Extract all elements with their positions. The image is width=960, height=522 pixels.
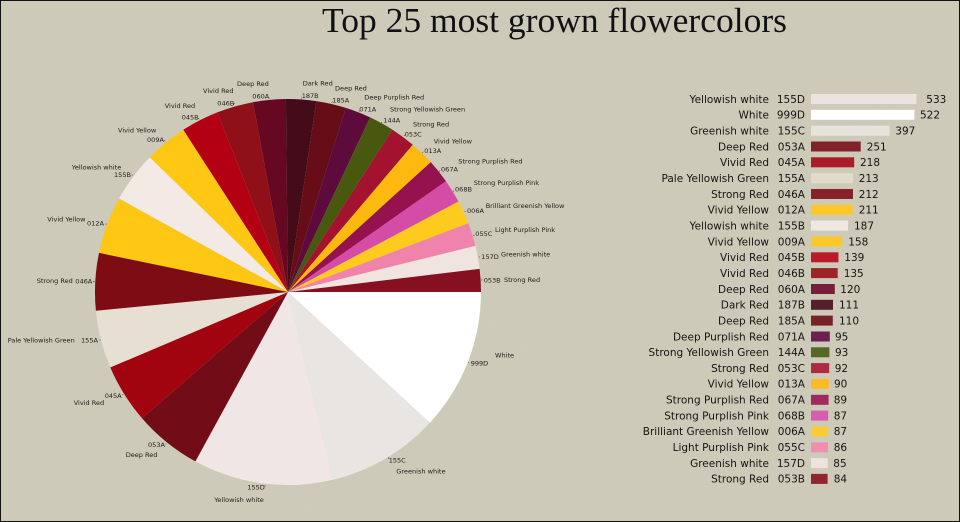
row: Vivid Yellow 009A: Vivid Yellow (708, 236, 769, 248)
row: Greenish white 157D: 157D (777, 458, 805, 470)
row: Strong Red 053C (711, 363, 848, 375)
label: 053C: 053C (405, 131, 422, 139)
wedge: Strong Red 046A (95, 253, 288, 311)
label: 045B (165, 102, 199, 122)
label: 053C: Strong Red (413, 120, 449, 128)
label: 155B (71, 163, 131, 179)
label: 185A (332, 84, 367, 105)
row: Vivid Yellow 013A: Vivid Yellow (708, 379, 769, 391)
label: 006A: Brilliant Greenish Yellow (486, 202, 565, 210)
wedge: Vivid Red 045B (183, 112, 288, 292)
label: 068B (455, 179, 539, 194)
label: 155C: 155C (389, 456, 406, 464)
title: Top 25 most grown flowercolors (322, 1, 787, 40)
row: Brilliant Greenish Yellow 006A: 87 (834, 426, 847, 438)
wedge: White 999D (288, 292, 481, 423)
row: Pale Yellowish Green 155A: 213 (859, 173, 879, 185)
pie labels (8, 79, 565, 504)
row: Greenish white 155C (690, 126, 915, 138)
row: Pale Yellowish Green 155A (661, 173, 879, 185)
row: Deep Red 053A: 251 (867, 141, 887, 153)
wedge: Strong Purplish Red 067A (288, 162, 446, 292)
row: Pale Yellowish Green 155A: 155A (778, 173, 806, 185)
wedge: Yellowish white 155B (119, 157, 288, 292)
row: White 999D: 999D (777, 110, 805, 122)
row: Yellowish white 155B (689, 220, 874, 232)
row: Deep Purplish Red 071A: 071A (778, 331, 806, 343)
row: White 999D: 522 (920, 110, 940, 122)
label: 006A (467, 202, 565, 215)
row: Vivid Red 046B (720, 268, 864, 280)
label: 071A: 071A (359, 105, 377, 113)
label: 053A (126, 441, 165, 459)
row: Greenish white 155C: Greenish white (690, 126, 769, 138)
row: Deep Red 185A: Deep Red (718, 315, 769, 327)
row: Pale Yellowish Green 155A: Pale Yellowish Green (661, 173, 769, 185)
row: Light Purplish Pink 055C: 055C (778, 442, 805, 454)
label: 046A (37, 277, 93, 285)
row: Deep Red 185A: 185A (778, 315, 806, 327)
row: Deep Red 060A (718, 284, 860, 296)
label: 067A (441, 157, 523, 173)
row: Strong Red 046A: 046A (778, 189, 806, 201)
wedge: Vivid Red 046B (217, 102, 288, 292)
label: 009A: 009A (147, 136, 164, 144)
row: Greenish white 155C: 397 (895, 126, 915, 138)
label: 009A: Vivid Yellow (118, 126, 157, 134)
label: 053B (484, 276, 540, 284)
row: Deep Red 185A: 110 (839, 315, 859, 327)
label: 060A: 060A (252, 93, 270, 101)
label: 155C: Greenish white (396, 467, 446, 475)
label: 009A (118, 126, 164, 144)
label: 155A: 155A (81, 336, 98, 344)
row: Deep Purplish Red 071A: Deep Purplish Red (673, 331, 769, 343)
wedge: Strong Red 053B (288, 269, 481, 292)
row: Vivid Red 046B: 046B (778, 268, 805, 280)
label: 068B: 068B (455, 186, 472, 194)
row: Deep Red 053A: Deep Red (718, 141, 769, 153)
label: 071A (359, 93, 424, 113)
row: Dark Red 187B: Dark Red (721, 300, 769, 312)
row: Greenish white 157D (690, 458, 847, 470)
pie chart (95, 99, 481, 485)
label: 045A (74, 392, 122, 407)
label: 046B (203, 87, 235, 107)
label: 053B: Strong Red (504, 276, 540, 284)
row: Vivid Red 045B: Vivid Red (720, 252, 769, 264)
label: 071A: Deep Purplish Red (364, 93, 424, 101)
label: 187B (302, 79, 333, 100)
row: Strong Purplish Pink 068B: Strong Purplish Pink (664, 410, 770, 422)
label: 144A: Strong Yellowish Green (390, 105, 465, 113)
row: Vivid Yellow 012A: 012A (778, 205, 806, 217)
row: Strong Red 053C: 053C (778, 363, 805, 375)
row: Strong Purplish Pink 068B (664, 410, 847, 422)
wedge: Strong Purplish Pink 068B (288, 181, 458, 292)
row: Strong Yellowish Green 144A: Strong Yellowish Green (649, 347, 769, 359)
row: Vivid Yellow 013A: 013A (778, 379, 806, 391)
wedge: Dark Red 187B (286, 99, 316, 292)
row: Vivid Yellow 012A: Vivid Yellow (708, 205, 769, 217)
label: 068B: Strong Purplish Pink (474, 179, 539, 187)
row: White 999D (738, 110, 940, 122)
row: Strong Red 046A: 212 (859, 189, 879, 201)
wedge: Strong Red 053C (288, 130, 413, 292)
row: Vivid Yellow 013A: 90 (834, 379, 847, 391)
row: Vivid Red 045A: 045A (778, 157, 806, 169)
row: Strong Yellowish Green 144A: 144A (778, 347, 806, 359)
row: Yellowish white 155B: Yellowish white (689, 220, 769, 232)
label: 055C: Light Purplish Pink (495, 226, 555, 234)
wedge: Yellowish white 155D (195, 292, 333, 485)
label: 155B: Yellowish white (71, 163, 121, 171)
row: Strong Red 053C: 92 (835, 363, 848, 375)
row: Vivid Red 045A: 218 (860, 157, 880, 169)
label: 155C (389, 456, 446, 475)
label: 155B: 155B (114, 171, 131, 179)
row: Light Purplish Pink 055C: 86 (834, 442, 847, 454)
row: Vivid Yellow 012A (708, 205, 879, 217)
row: Vivid Yellow 009A: 009A (778, 236, 806, 248)
row: White 999D: White (738, 110, 769, 122)
wedge: Deep Purplish Red 071A (288, 108, 370, 292)
wedge: Pale Yellowish Green 155A (96, 292, 288, 367)
row: Yellowish white 155D: Yellowish white (689, 94, 769, 106)
row: Vivid Yellow 012A: 211 (859, 205, 879, 217)
label: 055C: 055C (475, 230, 493, 238)
row: Vivid Red 045A (720, 157, 880, 169)
label: 053C (405, 120, 449, 139)
label: 046A: Strong Red (37, 277, 73, 285)
label: 067A: 067A (441, 165, 458, 173)
row: Vivid Red 046B: Vivid Red (720, 268, 769, 280)
row: Strong Purplish Pink 068B: 87 (834, 410, 847, 422)
row: Vivid Red 046B: 135 (844, 268, 864, 280)
row: Dark Red 187B: 187B (778, 300, 805, 312)
row: Yellowish white 155B: 155B (778, 220, 805, 232)
label: 053A: 053A (148, 441, 165, 449)
row: Yellowish white 155D (689, 94, 946, 106)
row: Greenish white 157D: 85 (833, 458, 847, 470)
label: 999D: 999D (471, 359, 488, 367)
wedge: Light Purplish Pink 055C (288, 223, 475, 292)
row: Yellowish white 155D: 533 (926, 94, 946, 106)
label: 060A (237, 80, 270, 101)
wedge: Deep Red 185A (288, 101, 346, 292)
row: Strong Yellowish Green 144A: 93 (835, 347, 848, 359)
label: 053A: Deep Red (126, 451, 157, 459)
label: 155A: Pale Yellowish Green (8, 336, 75, 344)
row: Strong Red 053B: 84 (834, 474, 847, 486)
label: 999D (471, 351, 514, 367)
label: 144A (383, 105, 465, 124)
row: Greenish white 155C: 155C (778, 126, 805, 138)
row: Greenish white 157D: Greenish white (690, 458, 769, 470)
label: 012A (47, 215, 104, 228)
wedge: Greenish white 157D (288, 246, 480, 292)
label: 067A: Strong Purplish Red (458, 157, 523, 165)
label: 045B: 045B (182, 114, 199, 122)
row: Deep Purplish Red 071A: 95 (835, 331, 848, 343)
row: Strong Purplish Pink 068B: 068B (778, 410, 805, 422)
label: 046B: 046B (217, 99, 235, 107)
wedge: Deep Red 053A (142, 292, 288, 461)
row: Strong Red 053C: Strong Red (711, 363, 769, 375)
row: Deep Red 060A: 120 (840, 284, 860, 296)
label: 187B: 187B (302, 92, 319, 100)
wedge: Greenish white 155C (288, 292, 430, 480)
row: Vivid Yellow 009A: 158 (848, 236, 868, 248)
label: 013A: 013A (424, 147, 442, 155)
label: 157D: Greenish white (501, 251, 550, 259)
wedge: Vivid Yellow 013A (288, 145, 431, 292)
label: 055C (475, 226, 555, 238)
row: Vivid Yellow 009A (708, 236, 868, 248)
row: Dark Red 187B: 111 (839, 300, 859, 312)
row: Vivid Red 045A: Vivid Red (720, 157, 769, 169)
wedge: Vivid Yellow 009A (150, 130, 288, 292)
wedge: Vivid Yellow 012A (99, 198, 288, 292)
row: Brilliant Greenish Yellow 006A: 006A (778, 426, 806, 438)
row: Deep Red 060A: 060A (778, 284, 806, 296)
label: 013A (424, 138, 473, 155)
label: 013A: Vivid Yellow (434, 138, 473, 146)
row: Strong Red 046A (711, 189, 879, 201)
row: Deep Red 053A: 053A (778, 141, 806, 153)
row: Vivid Red 045B: 139 (844, 252, 864, 264)
row: Deep Red 060A: Deep Red (718, 284, 769, 296)
row: Dark Red 187B (721, 300, 859, 312)
row: Strong Purplish Red 067A: 067A (778, 395, 806, 407)
wedge: Brilliant Greenish Yellow 006A (288, 202, 468, 292)
label: 045A: 045A (105, 392, 122, 400)
wedge: Vivid Red 045A (110, 292, 288, 418)
row: Strong Yellowish Green 144A (649, 347, 848, 359)
row: Vivid Yellow 013A (708, 379, 847, 391)
label: 157D: 157D (481, 253, 499, 261)
row: Strong Red 053B (711, 474, 847, 486)
row: Light Purplish Pink 055C: Light Purplish Pink (673, 442, 770, 454)
row: Yellowish white 155D: 155D (777, 94, 805, 106)
label: 012A: 012A (87, 220, 104, 228)
row: Deep Red 053A (718, 141, 887, 153)
label: 045B: Vivid Red (165, 102, 195, 110)
label: 144A: 144A (383, 116, 401, 124)
label: 012A: Vivid Yellow (47, 215, 86, 223)
label: 157D (481, 251, 550, 261)
label: 046B: Vivid Red (203, 87, 234, 95)
label: 155D (213, 483, 265, 504)
row: Yellowish white 155B: 187 (854, 220, 874, 232)
row: Brilliant Greenish Yellow 006A: Brilliant Greenish Yellow (643, 426, 769, 438)
label: 046A: 046A (75, 277, 93, 285)
row: Vivid Red 045B (720, 252, 864, 264)
wedge: Deep Red 060A (253, 99, 288, 292)
row: Strong Purplish Red 067A (666, 395, 847, 407)
label: 185A: Deep Red (335, 84, 367, 92)
row: Strong Red 053B: 053B (778, 474, 805, 486)
wedge: Strong Yellowish Green 144A (288, 117, 392, 292)
label: 045A: Vivid Red (74, 399, 104, 407)
label: 155D: 155D (247, 483, 265, 491)
label: 155D: Yellowish white (213, 496, 264, 504)
row: Strong Purplish Red 067A: 89 (834, 395, 847, 407)
row: Brilliant Greenish Yellow 006A (643, 426, 847, 438)
row: Strong Red 046A: Strong Red (711, 189, 769, 201)
label: 187B: Dark Red (303, 79, 333, 87)
label: 060A: Deep Red (237, 80, 269, 88)
label: 053B: 053B (484, 276, 501, 284)
label: 999D: White (495, 351, 514, 359)
row: Deep Red 185A (718, 315, 859, 327)
label: 185A: 185A (332, 97, 350, 105)
row: Deep Purplish Red 071A (673, 331, 848, 343)
bar chart (643, 94, 946, 486)
label: 006A: 006A (467, 207, 484, 215)
label ticks (93, 98, 482, 486)
row: Strong Red 053B: Strong Red (711, 474, 769, 486)
row: Vivid Red 045B: 045B (778, 252, 805, 264)
row: Strong Purplish Red 067A: Strong Purplish Red (666, 395, 769, 407)
row: Light Purplish Pink 055C (673, 442, 847, 454)
